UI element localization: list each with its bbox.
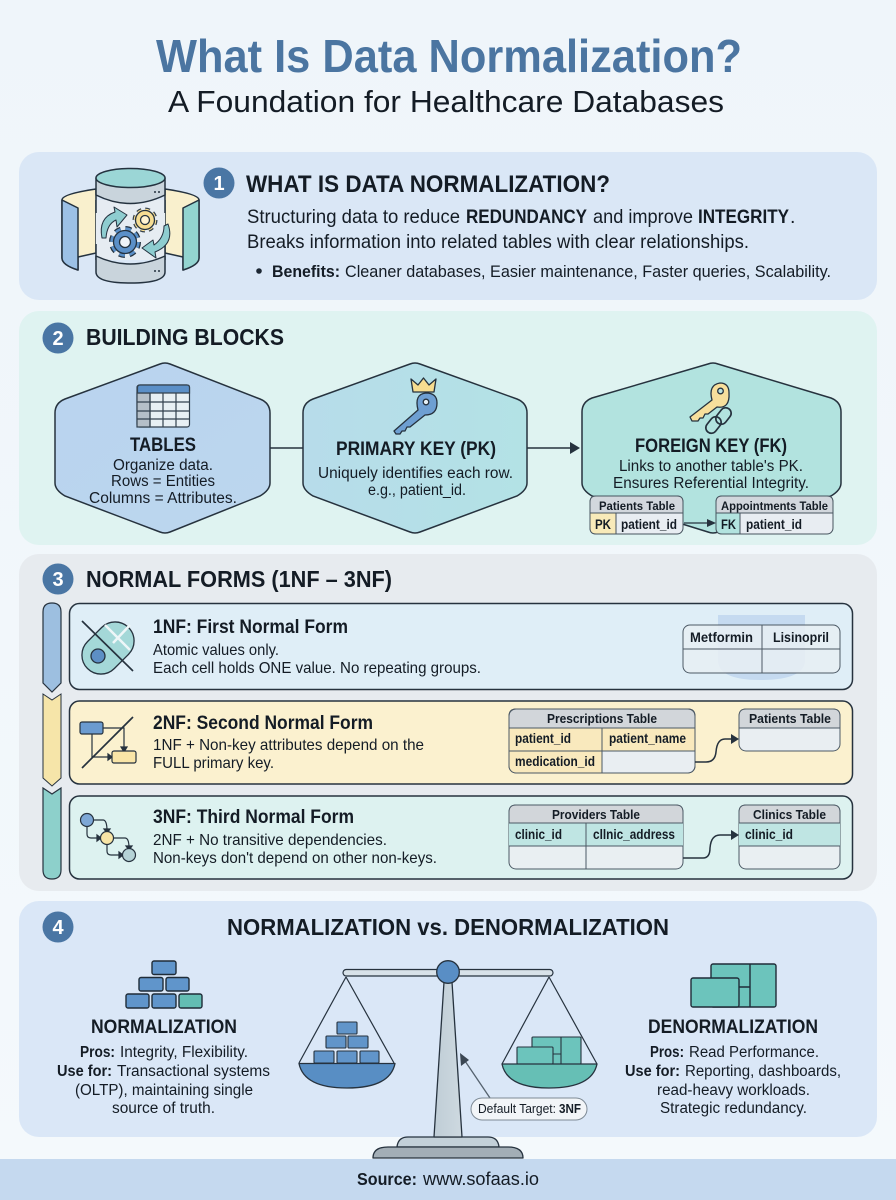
mini table: appointments: patient_id xyxy=(746,517,802,532)
icon: key with crown xyxy=(394,378,437,434)
description text: INTEGRITY xyxy=(698,206,789,228)
decorative pale cup behind table xyxy=(718,615,805,680)
mini table: patients: PK xyxy=(595,517,611,532)
card: 3NF: 2NF + No transitive dependencies. xyxy=(153,832,387,849)
mini table: appointments xyxy=(716,496,833,534)
hexagon: primary key xyxy=(303,363,527,533)
description text: . xyxy=(790,206,795,228)
table: providers: clinic_id xyxy=(515,827,562,842)
table: repeating values: Metformin xyxy=(690,629,753,645)
left pan with blocks xyxy=(299,977,395,1088)
denormalization description: Strategic redundancy. xyxy=(660,1100,807,1117)
foreign key description xyxy=(613,458,809,492)
arrow: patients to appointments xyxy=(684,519,716,527)
table: prescriptions: patient_id xyxy=(515,731,571,746)
section number 3: 3 xyxy=(52,569,64,591)
arrow: primary key to foreign key xyxy=(527,442,580,454)
table: prescriptions: Prescriptions Table xyxy=(547,711,657,726)
arrow: providers to clinics xyxy=(683,830,739,858)
mini table: patients: Patients Table xyxy=(599,499,675,513)
table: providers xyxy=(509,805,683,869)
card: 1NF: Atomic values only. xyxy=(153,642,279,659)
table: prescriptions: medication_id xyxy=(515,754,595,769)
table: prescriptions: patient_name xyxy=(609,731,686,746)
primary key description: Uniquely identifies each row. xyxy=(318,465,513,482)
card text: 3NF: Third Normal Form xyxy=(153,806,354,828)
card: 3NF: Non-keys don't depend on other non-keys. xyxy=(153,850,437,867)
section number 2: 2 xyxy=(52,328,64,350)
balance scale xyxy=(299,961,597,1158)
normalization description: Pros: xyxy=(80,1044,115,1061)
scale beam xyxy=(343,970,553,976)
primary key description: e.g., patient_id. xyxy=(368,482,466,499)
title: A Foundation for Healthcare Databases xyxy=(168,84,724,119)
right pan with blocks xyxy=(502,977,597,1088)
denormalization description: Read Performance. xyxy=(689,1044,819,1061)
card: 1NF xyxy=(70,604,852,690)
icon: key with chain xyxy=(690,383,733,435)
table: clinics: clinic_id xyxy=(745,827,793,842)
primary key description xyxy=(318,465,513,499)
panel: normalization vs denormalization xyxy=(19,901,877,1137)
heading: BUILDING BLOCKS xyxy=(86,324,284,350)
description text: and improve xyxy=(593,206,693,228)
title: What Is Data Normalization? xyxy=(156,30,742,82)
description text: REDUNDANCY xyxy=(466,206,587,228)
description text xyxy=(247,206,795,253)
foreign key description: Ensures Referential Integrity. xyxy=(613,475,809,492)
denormalization description: Reporting, dashboards, xyxy=(685,1063,841,1080)
hexagon: tables xyxy=(55,363,270,533)
icon: partial dependency xyxy=(80,717,136,768)
mini table: patients xyxy=(590,496,683,534)
table: clinics: Clinics Table xyxy=(753,807,826,822)
label: foreign key: FOREIGN KEY (FK) xyxy=(635,436,787,457)
icon: normalized blocks xyxy=(126,961,202,1008)
label: denormalization: DENORMALIZATION xyxy=(648,1017,818,1038)
heading: NORMALIZATION vs. DENORMALIZATION xyxy=(227,914,669,940)
callout: default target: Default Target: xyxy=(478,1102,556,1116)
card text: 2NF: Second Normal Form xyxy=(153,712,373,734)
section number 4: 4 xyxy=(52,917,64,939)
card: 2NF: FULL primary key. xyxy=(153,755,274,772)
icon: denormalized blocks xyxy=(691,964,776,1007)
table: repeating values xyxy=(683,625,840,673)
icon: transitive dependency xyxy=(80,814,136,862)
progress rail: 3NF xyxy=(43,788,61,879)
callout: default target: 3NF xyxy=(559,1102,581,1116)
normalization description: (OLTP), maintaining single xyxy=(75,1082,253,1099)
card: 2NF: 1NF + Non-key attributes depend on the xyxy=(153,737,424,754)
connector line xyxy=(270,447,303,449)
title xyxy=(156,30,742,119)
scale post xyxy=(434,982,462,1137)
icon: table grid xyxy=(137,385,190,427)
panel: normal forms xyxy=(19,554,877,891)
progress rail: 2NF xyxy=(43,694,61,786)
table: repeating values: Lisinopril xyxy=(773,629,829,645)
panel: building blocks xyxy=(19,311,877,545)
tables description: Organize data. xyxy=(113,457,213,474)
card: 1NF: Each cell holds ONE value. No repeating groups. xyxy=(153,660,481,677)
denormalization description xyxy=(625,1044,841,1117)
heading: WHAT IS DATA NORMALIZATION? xyxy=(246,171,610,198)
card: 2NF xyxy=(70,701,852,784)
section number 1 xyxy=(204,168,234,198)
footer xyxy=(0,1159,896,1200)
section number 4 xyxy=(42,912,74,942)
denormalization description: Use for: xyxy=(625,1063,680,1080)
normalization description: source of truth. xyxy=(112,1100,215,1117)
card text: 1NF: First Normal Form xyxy=(153,616,348,638)
table: clinics xyxy=(739,805,840,869)
description text: Breaks information into related tables with clear relationships. xyxy=(247,231,749,253)
icon: crossed out pill xyxy=(74,614,142,682)
mini table: patients: patient_id xyxy=(621,517,677,532)
tables description xyxy=(89,457,237,507)
table: providers: Providers Table xyxy=(552,807,640,822)
table: patients xyxy=(739,709,840,751)
icon: database with gears xyxy=(62,168,199,283)
tables description: Rows = Entities xyxy=(111,473,215,490)
section number 2 xyxy=(42,322,74,354)
label: normalization: NORMALIZATION xyxy=(91,1017,237,1038)
table: prescriptions xyxy=(509,709,695,773)
denormalization description: read-heavy workloads. xyxy=(657,1082,810,1099)
benefits bullet: Benefits: xyxy=(272,263,340,281)
normalization description: Integrity, Flexibility. xyxy=(120,1044,248,1061)
arrow: prescriptions to patients xyxy=(695,734,739,762)
denormalization description: Pros: xyxy=(650,1044,684,1061)
heading: NORMAL FORMS (1NF – 3NF) xyxy=(86,566,392,592)
hexagon: foreign key xyxy=(582,363,841,533)
card: 3NF xyxy=(70,796,852,879)
tables description: Columns = Attributes. xyxy=(89,490,237,507)
table: providers: cllnic_address xyxy=(593,827,675,842)
footer: Source: xyxy=(357,1169,417,1189)
panel: what is data normalization xyxy=(19,152,877,300)
label: tables: TABLES xyxy=(130,435,196,456)
mini table: appointments: FK xyxy=(721,517,736,532)
scale hub xyxy=(437,961,459,983)
normalization description: Transactional systems xyxy=(117,1063,270,1080)
scale base xyxy=(373,1137,523,1158)
section number 3 xyxy=(42,564,74,594)
table: patients: Patients Table xyxy=(749,711,831,726)
benefits bullet: Cleaner databases, Easier maintenance, Faster queries, Scalability. xyxy=(345,263,831,281)
footer: www.sofaas.io xyxy=(422,1169,539,1189)
normalization description: Use for: xyxy=(57,1063,112,1080)
description text: Structuring data to reduce xyxy=(247,206,460,228)
callout: default target xyxy=(460,1053,587,1120)
mini table: appointments: Appointments Table xyxy=(721,499,828,513)
label: primary key: PRIMARY KEY (PK) xyxy=(336,439,496,460)
progress rail: 1NF xyxy=(43,603,61,692)
normalization description xyxy=(57,1044,270,1117)
foreign key description: Links to another table's PK. xyxy=(619,458,803,475)
section number 1: 1 xyxy=(213,173,225,195)
